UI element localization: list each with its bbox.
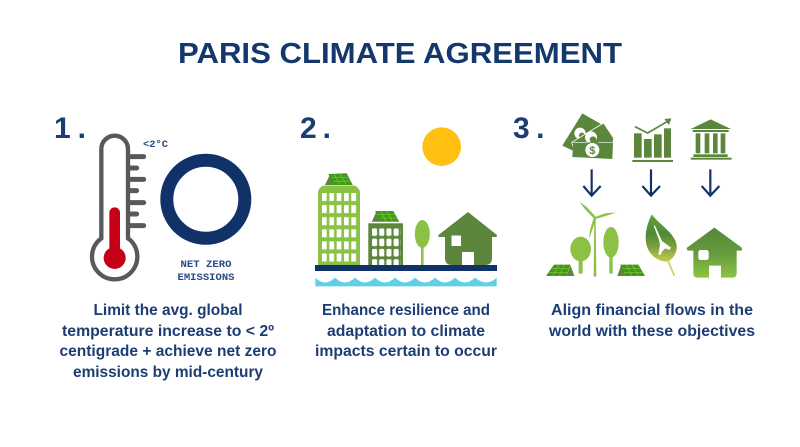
tall building with solar roof bbox=[318, 173, 360, 265]
icon: sun bbox=[422, 127, 461, 166]
tree bbox=[415, 220, 430, 265]
icon: wind turbine, trees and solar panels bbox=[546, 202, 645, 277]
text: objective 1: temperature increase to < 2º bbox=[62, 323, 274, 340]
text: objective 1: centigrade + achieve net zero bbox=[60, 343, 277, 360]
text: objective 2: impacts certain to occur bbox=[315, 343, 497, 360]
mid building with solar roof bbox=[368, 211, 403, 265]
text: objective 1 bbox=[60, 302, 277, 381]
text: objective 2: adaptation to climate bbox=[327, 323, 485, 340]
text: objective 1: emissions by mid-century bbox=[73, 364, 263, 381]
icon: money: $ bbox=[589, 145, 595, 157]
flow icons bbox=[583, 118, 732, 196]
icon: leaf with Eiffel tower bbox=[646, 214, 677, 276]
text: objective 3 bbox=[548, 302, 755, 340]
text: objective 3: Align financial flows in the bbox=[551, 302, 753, 319]
arrows bbox=[583, 169, 719, 196]
label: net zero emissions: EMISSIONS bbox=[178, 273, 234, 284]
text: objective 2 bbox=[315, 302, 497, 360]
label: net zero emissions: NET ZERO bbox=[180, 260, 232, 271]
label: net zero emissions bbox=[178, 260, 234, 284]
illustration: resilient city bbox=[315, 173, 497, 286]
text: objective 2: Enhance resilience and bbox=[322, 302, 490, 319]
icon: bank bbox=[691, 119, 732, 160]
house bbox=[438, 212, 497, 265]
number 3: 3. bbox=[513, 112, 551, 145]
ground bbox=[315, 265, 497, 271]
water bbox=[315, 278, 497, 286]
ring: net zero bbox=[167, 160, 245, 238]
text: objective 1: Limit the avg. global bbox=[94, 302, 242, 319]
number 1: 1. bbox=[54, 112, 93, 145]
number 2: 2. bbox=[300, 112, 337, 145]
title: PARIS CLIMATE AGREEMENT bbox=[178, 38, 623, 70]
icon: house bbox=[687, 228, 742, 278]
icon: growth chart bbox=[632, 118, 673, 162]
icon: thermometer bbox=[92, 136, 144, 279]
label: less than 2 degrees: <2°C bbox=[143, 139, 168, 151]
text: objective 3: world with these objectives bbox=[548, 323, 755, 340]
icon: money bbox=[562, 113, 614, 159]
